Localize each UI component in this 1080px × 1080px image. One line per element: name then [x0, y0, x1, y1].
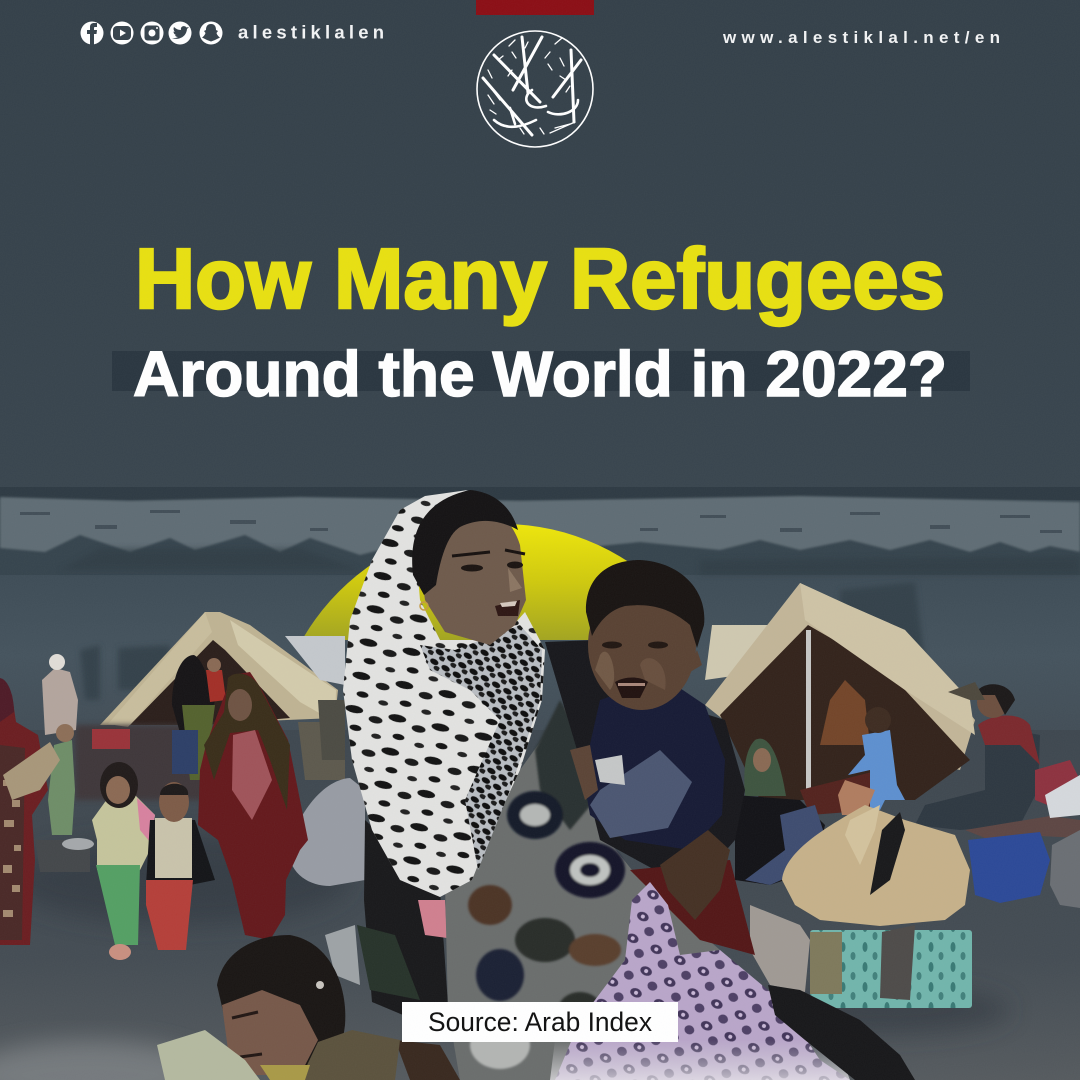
woman's head	[412, 490, 526, 645]
boy's head	[586, 560, 704, 710]
background white tent	[705, 625, 790, 680]
yellow sun	[302, 524, 640, 640]
boy's sweater	[570, 678, 725, 850]
title line 1: How Many Refugees	[135, 232, 945, 327]
scarf	[343, 490, 545, 897]
cooking pots	[35, 838, 94, 872]
man in white	[42, 654, 78, 735]
left tent	[100, 612, 345, 727]
child in blue	[838, 707, 905, 815]
seated man	[915, 682, 1040, 830]
social icons	[80, 22, 222, 45]
woman's dress	[445, 700, 720, 1080]
icon: instagram	[140, 22, 164, 44]
right tent	[705, 583, 975, 815]
icon: facebook	[80, 22, 104, 45]
tan sack	[782, 805, 970, 926]
icon: twitter	[168, 22, 192, 44]
background refugee camp strip	[0, 487, 1080, 700]
logo: calligraphy roundel	[477, 31, 593, 147]
teal bundle	[810, 925, 972, 1008]
red garment	[630, 860, 755, 955]
icon: youtube	[110, 22, 134, 44]
dark robed figure	[735, 795, 825, 885]
ground shadows	[10, 835, 1010, 1035]
girl in foreground	[157, 935, 400, 1080]
title line 2 band	[112, 351, 970, 391]
campers behind	[75, 655, 345, 800]
right camp group	[705, 583, 1080, 1008]
handle text: alestiklalen	[238, 22, 384, 42]
black handbag	[768, 985, 915, 1080]
mother's hand	[660, 830, 730, 920]
title line 2: Around the World in 2022?	[133, 338, 947, 410]
grey bag	[1050, 830, 1080, 908]
website text: www.alestiklal.net/en	[722, 28, 1000, 47]
left camp group	[0, 612, 365, 960]
boy in red	[146, 782, 215, 950]
woman and child	[325, 490, 915, 1080]
purple bag	[550, 882, 850, 1080]
left woman	[0, 678, 60, 945]
woman in red	[198, 672, 308, 940]
source label	[402, 1002, 678, 1042]
woman's leg	[364, 820, 448, 1020]
pots near leg	[325, 925, 360, 985]
seated woman in green	[744, 739, 786, 796]
grey sack	[750, 905, 810, 992]
bedding right	[965, 760, 1080, 840]
title	[112, 232, 970, 410]
mother's arm	[545, 640, 745, 880]
header: red tab	[476, 0, 594, 15]
girl in pink and green	[92, 762, 155, 960]
source label: Source: Arab Index	[428, 1007, 652, 1037]
child in green	[48, 724, 75, 835]
icon: snapchat	[200, 22, 222, 44]
woman's hand at bottom	[395, 1040, 460, 1080]
white sack	[288, 778, 365, 886]
blue bag	[968, 832, 1050, 903]
